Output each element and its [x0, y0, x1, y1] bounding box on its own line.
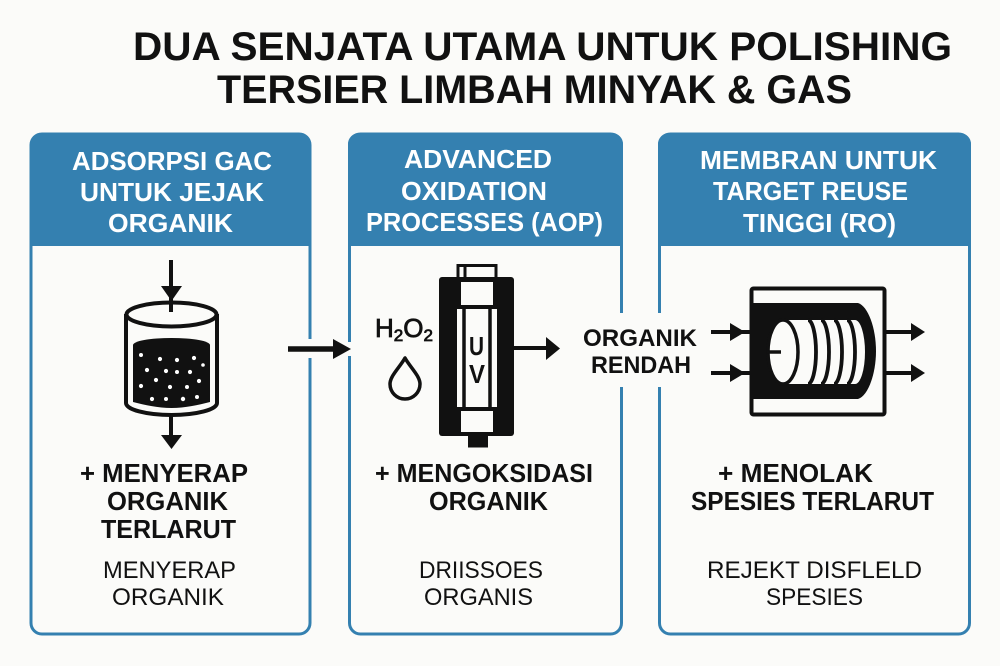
benefit text: adsorpsi GAC [80, 458, 248, 544]
benefit text: adsorpsi GAC: TERLARUT [101, 514, 236, 544]
caption: membrane RO: REJEKT DISFLELD [707, 557, 922, 584]
label: organik rendah: RENDAH [591, 352, 691, 379]
icon: H2O2 dosing label: 2 [423, 326, 433, 345]
title [133, 25, 952, 112]
panel header: advanced oxidation: PROCESSES (AOP) [366, 207, 603, 237]
benefit text: adsorpsi GAC: + MENYERAP [80, 458, 248, 488]
panel: advanced oxidation [348, 133, 623, 634]
panel header: membrane RO: MEMBRAN UNTUK [700, 145, 937, 175]
icon: RO membrane module [711, 288, 925, 414]
panel: membrane RO [658, 133, 971, 634]
caption: membrane RO: SPESIES [766, 584, 863, 611]
benefit text: membrane RO: SPESIES TERLARUT [691, 486, 934, 516]
benefit text: membrane RO [691, 458, 934, 516]
icon: UV reactor [439, 265, 514, 448]
caption: adsorpsi GAC: ORGANIK [112, 584, 224, 611]
benefit text: membrane RO: + MENOLAK [718, 458, 873, 488]
icon: H2O2 dosing label: O [403, 313, 423, 343]
panel: adsorpsi GAC [30, 133, 311, 634]
icon: H2O2 drop [390, 358, 420, 399]
icon: H2O2 dosing label: 2 [394, 326, 403, 345]
caption: adsorpsi GAC: MENYERAP [103, 557, 236, 584]
panel header: adsorpsi GAC [30, 133, 311, 246]
caption: advanced oxidation: DRIISSOES [419, 557, 543, 584]
panel header: membrane RO [658, 133, 971, 246]
title: TERSIER LIMBAH MINYAK & GAS [217, 68, 852, 112]
caption: adsorpsi GAC [103, 557, 236, 611]
benefit text: adsorpsi GAC: ORGANIK [107, 486, 228, 516]
caption: advanced oxidation: ORGANIS [424, 584, 533, 611]
icon: UV reactor: U [469, 331, 484, 361]
icon: GAC column with inflow and outflow arrows [126, 260, 217, 449]
benefit text: advanced oxidation [375, 458, 593, 516]
icon: UV reactor: V [469, 359, 486, 389]
caption: membrane RO [707, 557, 922, 611]
benefit text: advanced oxidation: + MENGOKSIDASI [375, 458, 593, 488]
icon: H2O2 dosing label [375, 313, 433, 345]
label: organik rendah: ORGANIK [583, 325, 698, 352]
panel header: adsorpsi GAC: ADSORPSI GAC [72, 146, 272, 176]
label: organik rendah [583, 325, 698, 379]
caption: advanced oxidation [419, 557, 543, 611]
arrow: GAC to AOP [288, 339, 351, 359]
arrow: AOP output [514, 337, 560, 360]
panel header: advanced oxidation: ADVANCED [404, 144, 552, 174]
panel header: advanced oxidation [348, 133, 623, 246]
panel header: membrane RO: TARGET REUSE [713, 176, 908, 206]
benefit text: advanced oxidation: ORGANIK [429, 486, 548, 516]
panel header: advanced oxidation: OXIDATION [401, 176, 547, 206]
panel header: adsorpsi GAC: UNTUK JEJAK [80, 177, 264, 207]
panel header: membrane RO: TINGGI (RO) [743, 208, 896, 238]
icon: H2O2 dosing label: H [375, 313, 394, 343]
title: DUA SENJATA UTAMA UNTUK POLISHING [133, 25, 952, 69]
panel header: adsorpsi GAC: ORGANIK [108, 208, 233, 238]
